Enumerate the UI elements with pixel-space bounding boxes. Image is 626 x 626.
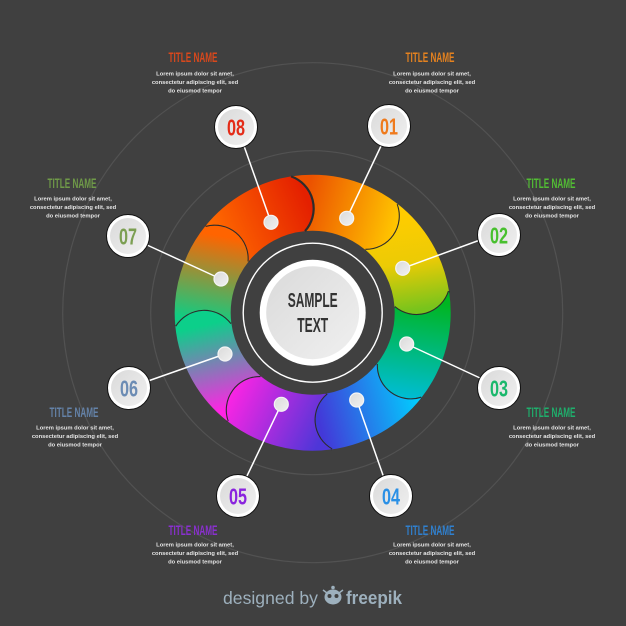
text block 03: TITLE NAME	[526, 405, 576, 420]
text block 04: Lorem ipsum dolor sit amet,	[393, 542, 471, 548]
badge 02	[478, 214, 520, 256]
text block 05: TITLE NAME	[168, 523, 218, 538]
text block 04: do eiusmod tempor	[405, 560, 460, 566]
segment 08	[206, 176, 314, 262]
badge 01: 01	[380, 113, 398, 139]
text block 02: TITLE NAME	[526, 176, 576, 191]
connector 05	[246, 397, 288, 478]
segment 04	[315, 364, 421, 449]
badge 04	[370, 474, 412, 518]
badge 02: 02	[490, 222, 508, 248]
badge 01	[368, 104, 410, 148]
text block 07: Lorem ipsum dolor sit amet,	[34, 196, 112, 202]
connector 06	[148, 347, 232, 381]
text block 01: TITLE NAME	[406, 50, 454, 65]
centre text	[288, 289, 338, 337]
text block 03: consectetur adipiscing elit, sed	[509, 434, 596, 440]
segment 02	[365, 204, 449, 315]
text block 04	[389, 523, 476, 566]
badge 03	[478, 366, 520, 410]
connector 08	[244, 146, 278, 229]
text block 08: consectetur adipiscing elit, sed	[152, 80, 239, 86]
text block 05: consectetur adipiscing elit, sed	[152, 551, 239, 557]
segment 03	[377, 291, 451, 399]
text block 02: consectetur adipiscing elit, sed	[509, 205, 596, 211]
badge 06	[108, 366, 150, 410]
text block 07: TITLE NAME	[48, 176, 96, 191]
centre ring	[243, 243, 382, 382]
text block 03: do eiusmod tempor	[525, 442, 580, 448]
text block 05	[152, 523, 239, 566]
connector 04	[350, 393, 384, 478]
text block 06: TITLE NAME	[50, 405, 98, 420]
segment 06	[175, 310, 260, 421]
text block 08: do eiusmod tempor	[168, 88, 223, 94]
badge 05	[216, 474, 260, 518]
text block 02: do eiusmod tempor	[525, 214, 580, 220]
centre text: TEXT	[297, 314, 328, 337]
text block 06	[32, 405, 119, 448]
text block 04: TITLE NAME	[406, 523, 454, 538]
text block 03: Lorem ipsum dolor sit amet,	[513, 426, 591, 432]
connector 03	[400, 337, 480, 378]
centre disc	[260, 260, 366, 366]
icon: freepik mascot	[323, 586, 343, 604]
badge 03: 03	[490, 375, 508, 401]
badge 08: 08	[227, 114, 245, 140]
connector 01	[340, 146, 381, 225]
text block 02	[509, 176, 596, 220]
text block 06: Lorem ipsum dolor sit amet,	[36, 426, 114, 432]
text block 01: consectetur adipiscing elit, sed	[389, 80, 476, 86]
text block 01: do eiusmod tempor	[405, 88, 460, 94]
connector 07	[147, 245, 228, 286]
text block 06: consectetur adipiscing elit, sed	[32, 434, 119, 440]
text block 08: Lorem ipsum dolor sit amet,	[156, 72, 234, 78]
badge 06: 06	[120, 375, 138, 401]
badge 07: 07	[119, 223, 137, 249]
footer credit: freepik	[346, 588, 403, 608]
segment 01	[291, 175, 400, 250]
text block 04: consectetur adipiscing elit, sed	[389, 551, 476, 557]
badge 05: 05	[229, 483, 247, 509]
guide rings	[63, 63, 563, 563]
badge 04: 04	[382, 483, 400, 509]
badge 07	[106, 214, 150, 258]
centre text: SAMPLE	[288, 289, 338, 312]
text block 02: Lorem ipsum dolor sit amet,	[513, 196, 591, 202]
text block 06: do eiusmod tempor	[48, 442, 103, 448]
footer credit: designed by	[223, 588, 318, 608]
text block 05: do eiusmod tempor	[168, 560, 223, 566]
connector 02	[396, 240, 480, 275]
text block 03	[509, 405, 596, 448]
text block 08: TITLE NAME	[168, 50, 218, 65]
text block 07	[30, 176, 117, 220]
text block 07: consectetur adipiscing elit, sed	[30, 205, 117, 211]
text block 01	[389, 50, 476, 94]
segment 07	[175, 225, 249, 326]
footer credit	[223, 586, 403, 608]
segment 05	[226, 376, 332, 451]
badge 08	[214, 106, 258, 148]
text block 08	[152, 50, 239, 94]
text block 01: Lorem ipsum dolor sit amet,	[393, 72, 471, 78]
text block 05: Lorem ipsum dolor sit amet,	[156, 542, 234, 548]
colour wheel	[175, 175, 451, 451]
text block 07: do eiusmod tempor	[46, 214, 101, 220]
